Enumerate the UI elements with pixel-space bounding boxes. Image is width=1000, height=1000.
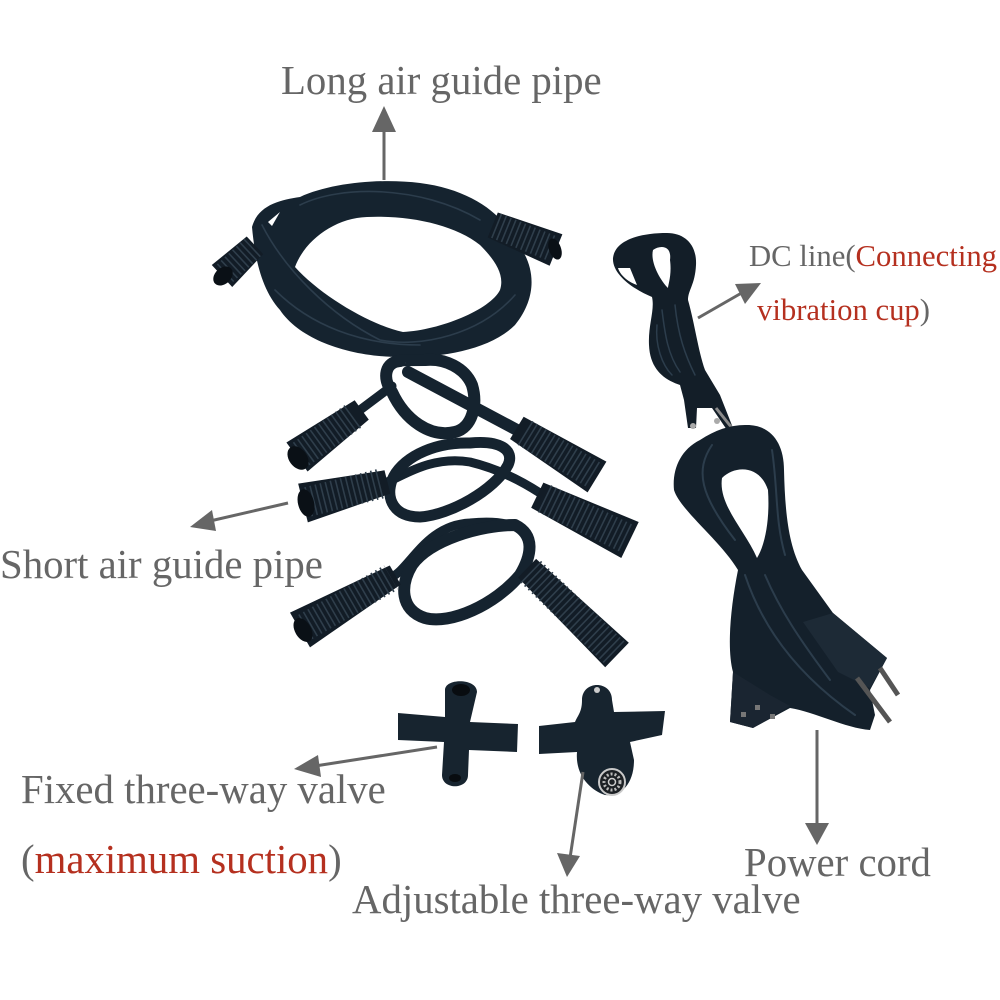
arrow: long pipe [372,106,396,180]
arrow: power cord [805,730,829,845]
label: fixed three-way valve: Fixed three-way valve [21,767,386,812]
label: adjustable valve: Adjustable three-way valve [352,877,801,922]
short air guide pipes [283,360,639,667]
adjustable three-way valve [539,685,665,795]
arrow: short pipe [190,503,288,531]
label: DC line [749,239,997,327]
arrow: fixed valve [294,747,437,777]
arrow: adjustable valve [557,772,583,877]
label: DC line: DC line(Connecting [749,239,997,273]
DC line [613,233,733,430]
label: fixed three-way valve: (maximum suction) [21,837,342,882]
arrow: DC line [698,283,761,318]
label: fixed three-way valve [21,767,386,882]
label: short air guide pipe: Short air guide pipe [0,542,323,587]
title: long air guide pipe: Long air guide pipe [281,58,602,103]
power cord [674,425,898,730]
label: power cord: Power cord [744,840,931,885]
fixed three-way valve [398,681,518,786]
long air guide pipe [209,181,564,357]
label: DC line: vibration cup) [757,293,930,327]
